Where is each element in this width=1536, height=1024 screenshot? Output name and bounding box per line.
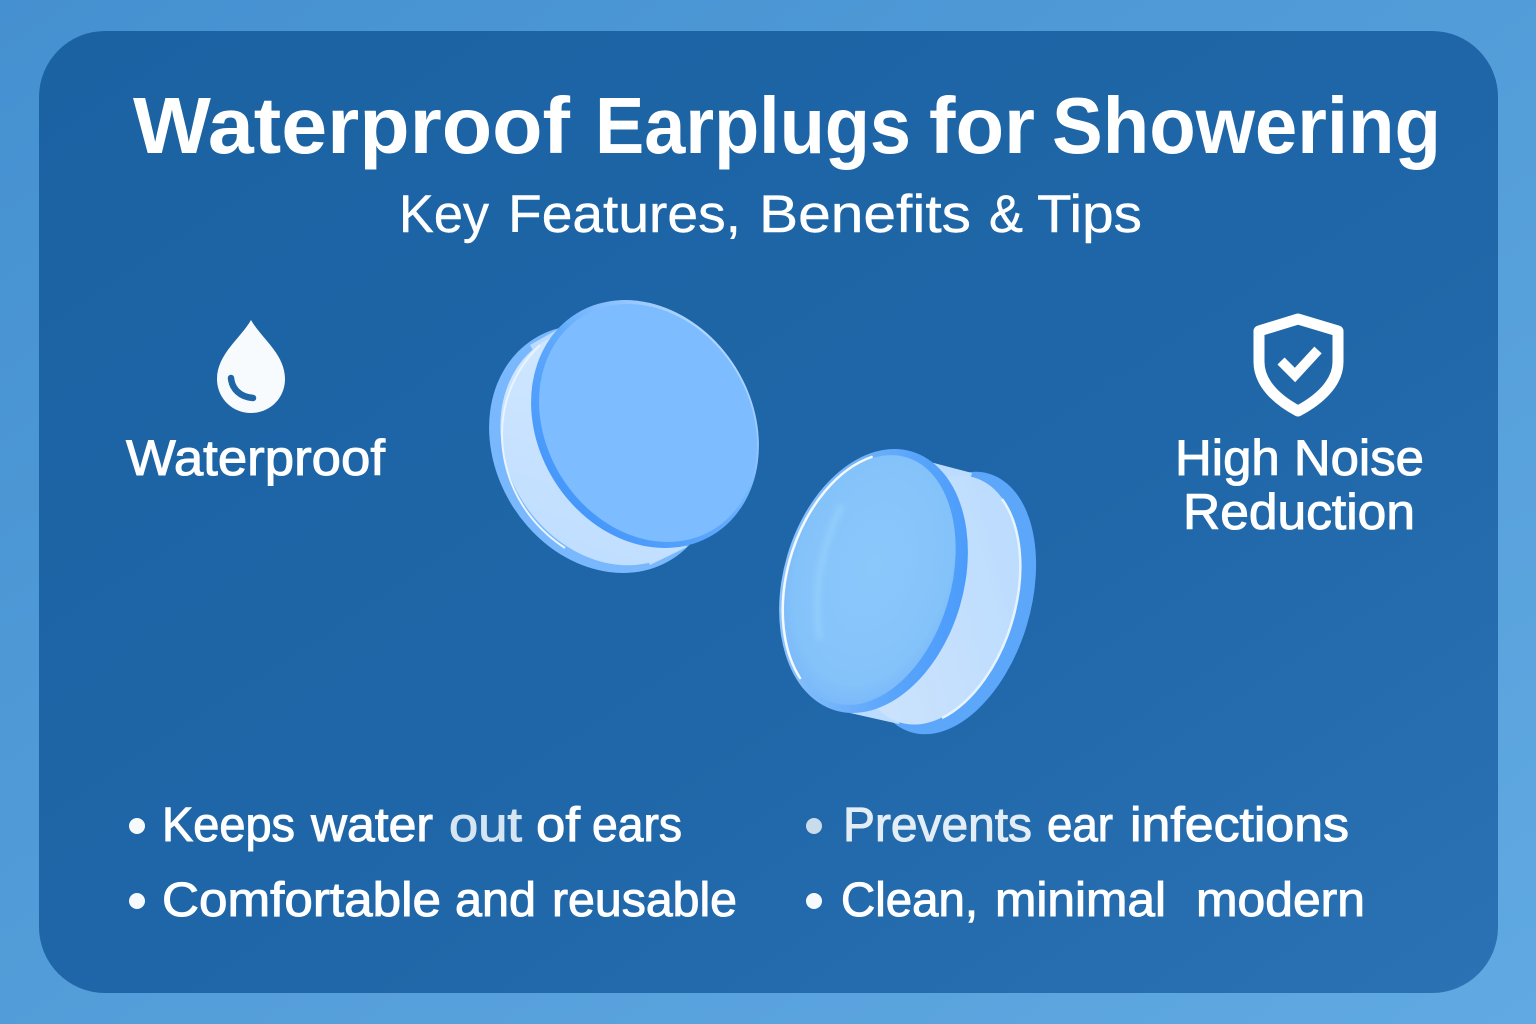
bullet: keeps water out of ears [129, 799, 682, 852]
bullet: keeps water out of ears: ears [592, 799, 682, 852]
earplug: lower right [749, 426, 1066, 755]
subtitle: Tips [1037, 185, 1142, 244]
icon: shield with check [1259, 319, 1338, 411]
feature: waterproof [126, 320, 385, 486]
icon: water drop [217, 320, 285, 413]
bullet: prevents ear infections: infections [1130, 799, 1349, 852]
label: waterproof: Waterproof [126, 430, 385, 486]
bullet: comfortable and reusable [129, 874, 737, 927]
subtitle: & [989, 185, 1023, 244]
bullet: clean, minimal modern: Clean, [841, 874, 978, 927]
subtitle: Key [399, 185, 489, 244]
bullet: prevents ear infections: Prevents [843, 799, 1032, 852]
title: Showering [1052, 81, 1441, 170]
bullet: keeps water out of ears: Keeps [162, 799, 295, 852]
label: high noise reduction: Reduction [1183, 484, 1415, 540]
bullet list: left column [129, 799, 737, 927]
title: Waterproof [133, 81, 570, 170]
label: high noise reduction: High Noise [1175, 430, 1424, 486]
subtitle: Features, [508, 185, 741, 244]
title: for [929, 81, 1035, 170]
bullet: keeps water out of ears: of [536, 799, 581, 852]
feature: high noise reduction [1175, 319, 1424, 540]
bullet: prevents ear infections: ear [1047, 799, 1113, 852]
bullet: keeps water out of ears: out [449, 799, 522, 852]
title: Earplugs [595, 81, 911, 170]
bullet: comfortable and reusable: reusable [552, 874, 737, 927]
bullet list: right column [806, 799, 1365, 927]
bullet: clean, minimal modern: minimal [995, 874, 1166, 927]
bullet: clean, minimal modern [806, 874, 1365, 927]
bullet: keeps water out of ears: water [310, 799, 433, 852]
earplug: upper left [443, 257, 805, 616]
subtitle: Benefits [759, 185, 971, 244]
bullet: comfortable and reusable: and [455, 874, 536, 927]
label: high noise reduction [1175, 430, 1424, 540]
bullet: prevents ear infections [806, 799, 1349, 852]
bullet: clean, minimal modern: modern [1196, 874, 1365, 927]
bullet: comfortable and reusable: Comfortable [162, 874, 441, 927]
